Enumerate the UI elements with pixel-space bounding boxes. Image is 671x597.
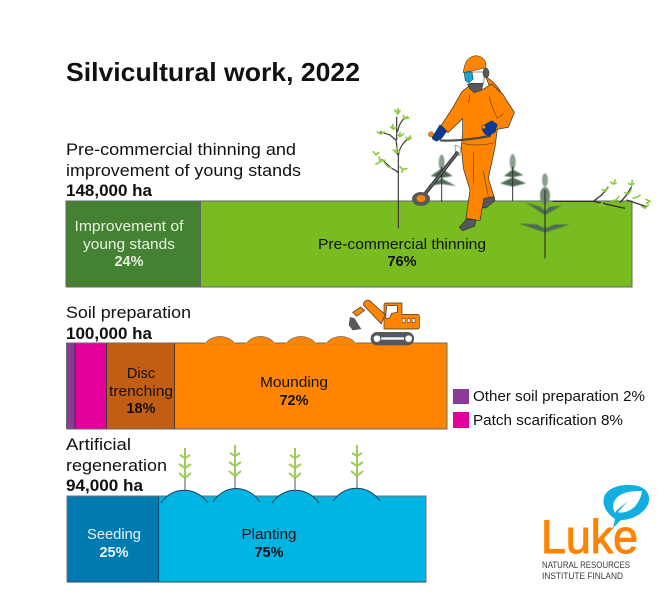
legend item: other soil preparation: Other soil preparation 2% [473, 389, 645, 405]
panel: artificial regeneration bar: Seeding [87, 527, 141, 543]
panel: artificial regeneration bar: Planting [242, 527, 296, 543]
legend [453, 389, 645, 429]
heading: pre-commercial thinning: improvement of young stands [66, 161, 301, 180]
icon: excavator [349, 300, 419, 345]
logo: institute name: INSTITUTE FINLAND [542, 571, 623, 581]
panel: soil preparation bar: 72% [279, 393, 309, 409]
heading: artificial regeneration [66, 435, 167, 495]
heading: pre-commercial thinning: 148,000 ha [66, 181, 153, 200]
panel: soil preparation bar [66, 336, 447, 429]
heading: pre-commercial thinning: Pre-commercial thinning and [66, 140, 296, 159]
icon: birch sapling [373, 109, 411, 228]
icon: seedling 1 [179, 448, 191, 491]
heading: pre-commercial thinning [66, 140, 301, 200]
panel: thinning bar: 24% [114, 254, 144, 270]
panel: thinning bar: young stands [83, 237, 175, 253]
title: Silvicultural work, 2022 [66, 57, 360, 87]
panel: soil preparation bar: Disc [127, 366, 155, 382]
icon: small spruce right [500, 154, 526, 201]
panel: artificial regeneration bar: 25% [99, 545, 129, 561]
icon: large spruce [518, 173, 570, 258]
panel: artificial regeneration bar [67, 488, 426, 582]
panel: thinning bar [66, 201, 632, 287]
icon: seedling 3 [289, 448, 301, 491]
heading: soil preparation: Soil preparation [66, 303, 191, 322]
logo: Luke [541, 485, 649, 581]
heading: artificial regeneration: regeneration [66, 456, 167, 475]
panel: artificial regeneration bar: 75% [254, 545, 284, 561]
icon: fallen branch [553, 180, 650, 208]
panel: thinning bar: 76% [387, 254, 417, 270]
logo: wordmark: Luke [541, 510, 638, 563]
icon: small spruce left [428, 155, 456, 202]
icon: forestry worker with brush cutter [412, 56, 514, 231]
legend item: patch scarification: Patch scarification 8% [473, 413, 623, 429]
heading: artificial regeneration: 94,000 ha [66, 476, 144, 495]
panel: thinning bar: Improvement of [74, 219, 185, 235]
panel: soil preparation bar: Mounding [260, 375, 328, 391]
panel: soil preparation bar: trenching [109, 384, 173, 400]
icon: seedling 4 [351, 445, 363, 489]
heading: soil preparation: 100,000 ha [66, 324, 153, 343]
heading: soil preparation [66, 303, 191, 343]
logo: institute name [542, 560, 630, 581]
logo: speech bubble leaf [603, 485, 649, 528]
panel: thinning bar: Pre-commercial thinning [318, 237, 486, 253]
icon: seedling 2 [229, 445, 241, 489]
heading: artificial regeneration: Artificial [66, 435, 131, 454]
logo: institute name: NATURAL RESOURCES [542, 560, 630, 570]
panel: soil preparation bar: 18% [126, 401, 156, 417]
